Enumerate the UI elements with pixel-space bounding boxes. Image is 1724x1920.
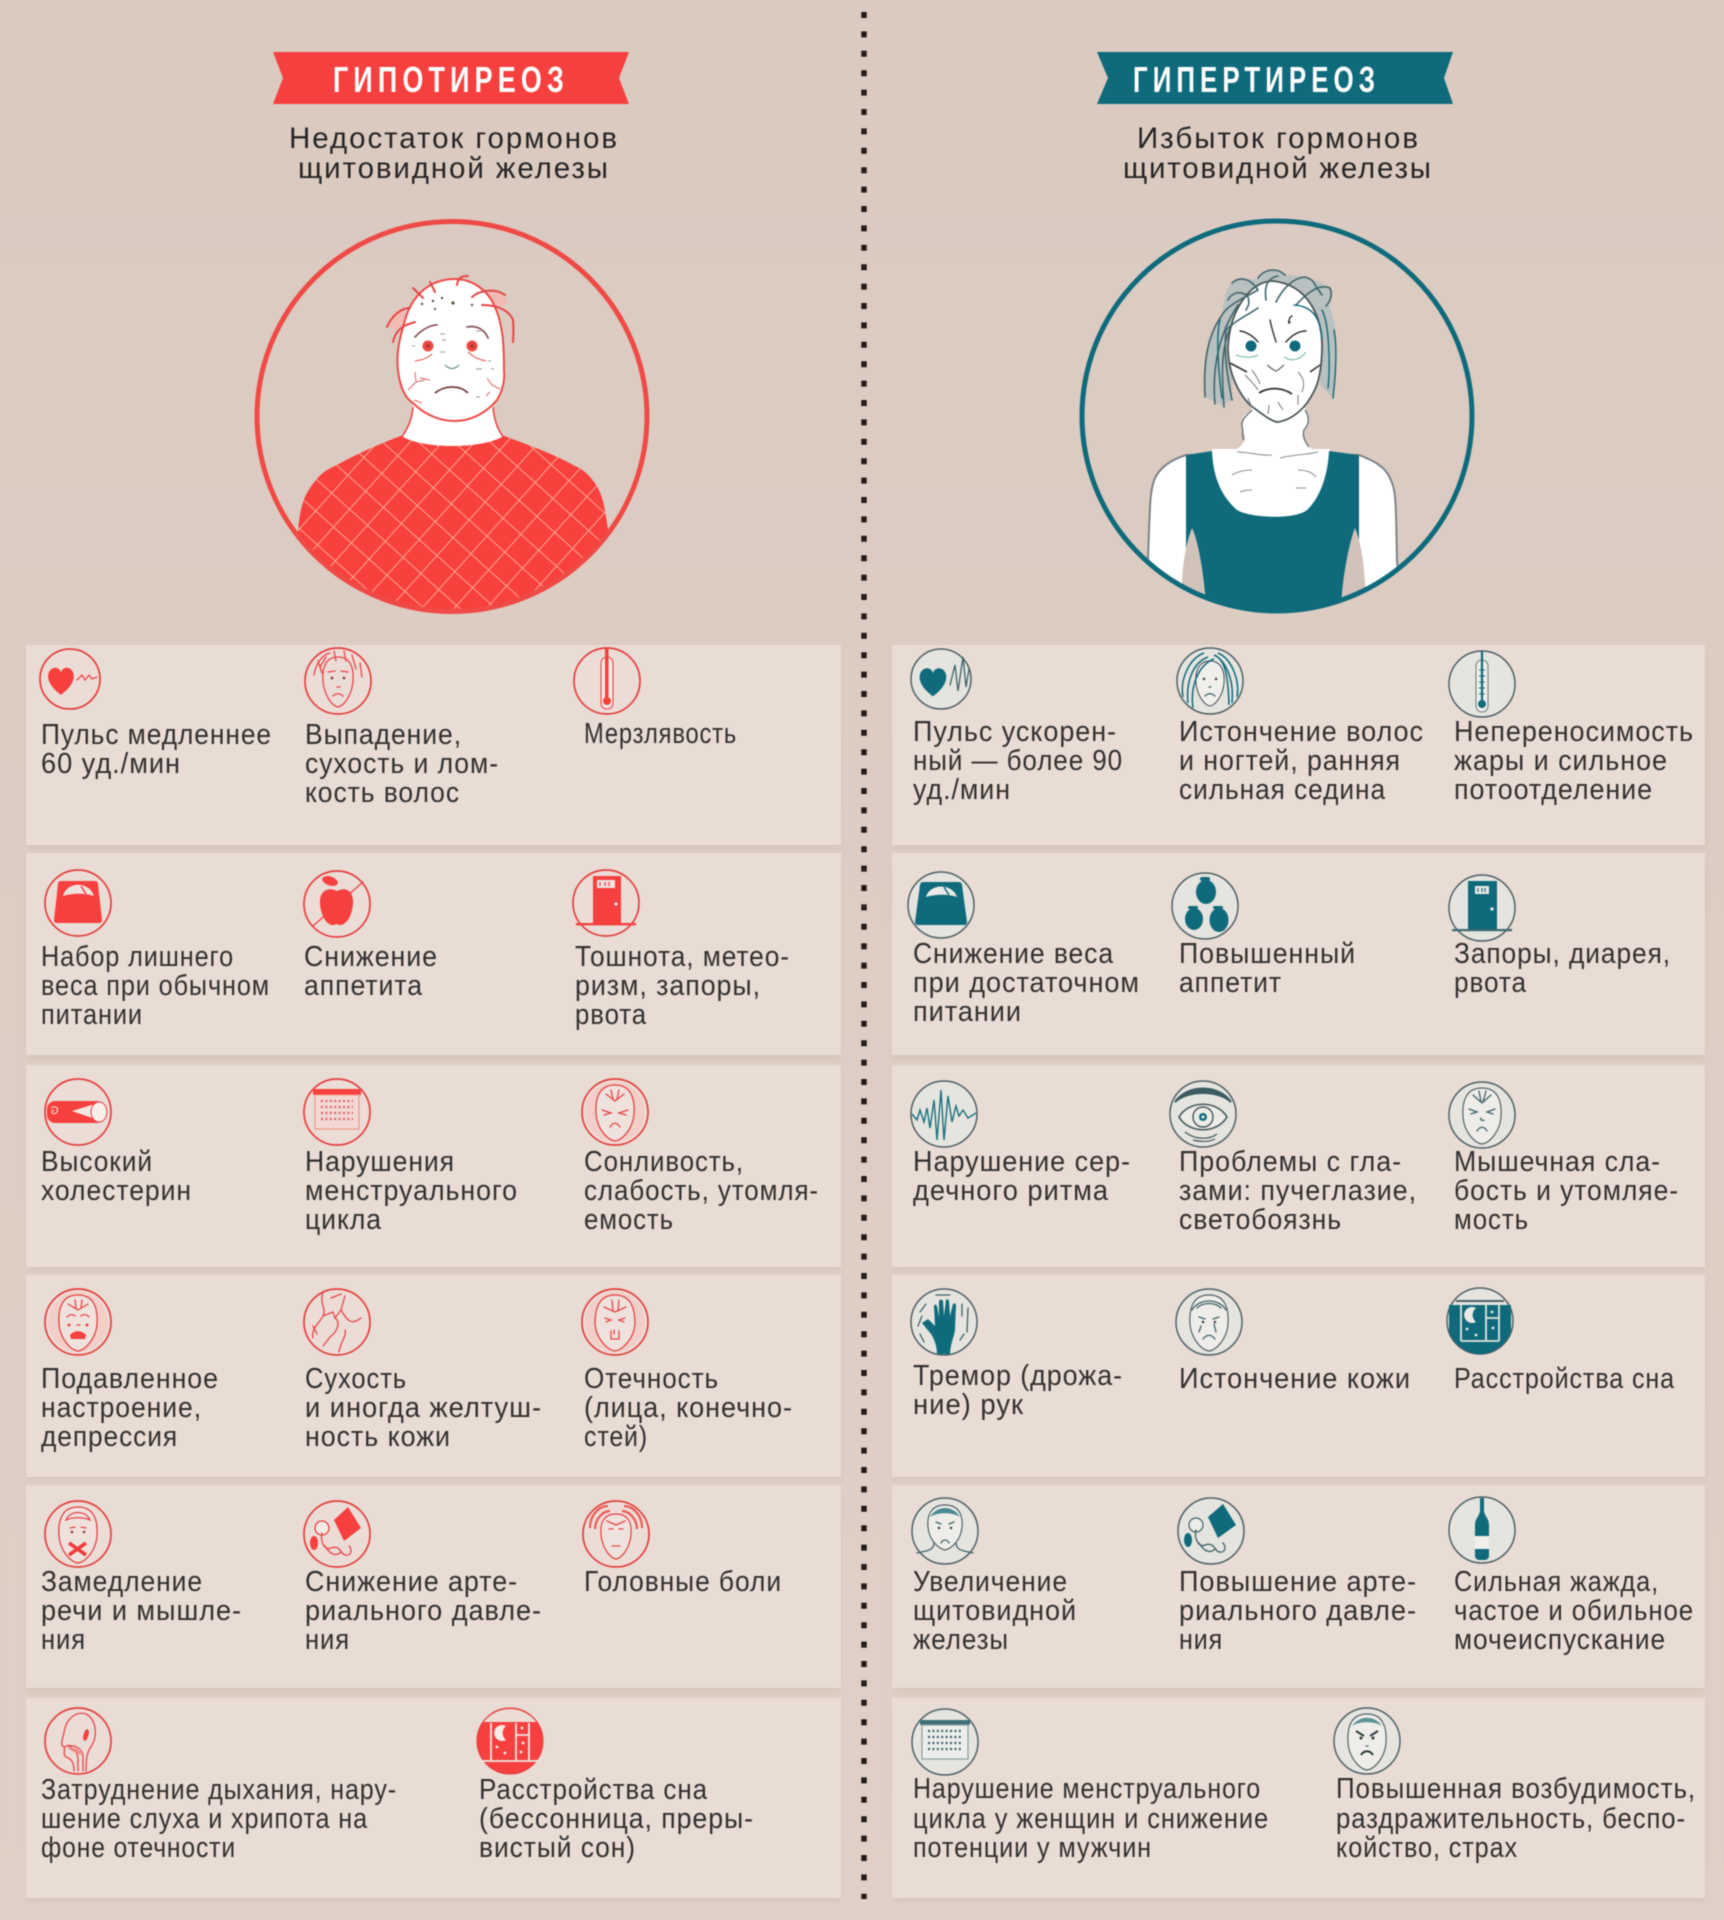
label: Повышенный: [1179, 938, 1356, 970]
label: ния: [1179, 1624, 1223, 1656]
symptom: depression: [41, 1289, 219, 1453]
header: hypothyroidism: [273, 52, 629, 185]
label: ния: [305, 1624, 350, 1656]
label: и ногтей, ранняя: [1179, 745, 1401, 777]
symptom: menstrual and potency disorder: [912, 1709, 1269, 1864]
icon: face with enlarged neck: [912, 1498, 978, 1564]
label: уд./мин: [913, 774, 1011, 806]
label: Непереносимость: [1454, 716, 1694, 748]
symptom: low blood pressure: [304, 1501, 542, 1656]
label: Пульс ускорен-: [913, 716, 1117, 748]
label: мочеиспускание: [1454, 1624, 1666, 1656]
label: [913, 1146, 1131, 1207]
symptom: swelling: [582, 1289, 793, 1453]
label: Тошнота, метео-: [575, 941, 790, 973]
panel: left row 4: [26, 1275, 841, 1477]
symptom: slow pulse: [40, 649, 272, 780]
symptom: eye problems: [1170, 1081, 1417, 1236]
label: (лица, конечно-: [584, 1392, 793, 1424]
label: Увеличение: [913, 1566, 1068, 1598]
label: питании: [41, 999, 143, 1031]
label: рвота: [1454, 967, 1527, 999]
symptom: reduced appetite: [304, 871, 438, 1002]
icon: water bottle: [1449, 1497, 1515, 1563]
symptom: hair loss: [305, 648, 499, 809]
symptom: weight gain: [41, 870, 270, 1031]
label: Нарушение сер-: [913, 1146, 1131, 1178]
label: Мышечная сла-: [1454, 1146, 1661, 1178]
label: Затруднение дыхания, нару-: [41, 1774, 397, 1806]
symptom: heat intolerance: [1449, 651, 1694, 806]
label: [479, 1774, 754, 1864]
label: ния: [41, 1624, 86, 1656]
label: [1179, 1566, 1417, 1656]
symptom: constipation, diarrhea: [1449, 875, 1671, 999]
subtitle: hormone deficiency: щитовидной железы: [298, 152, 608, 185]
label: [41, 719, 272, 780]
symptom: enlarged thyroid: [912, 1498, 1077, 1656]
label: риального давле-: [305, 1595, 542, 1627]
symptom: drowsiness: [582, 1079, 819, 1236]
label: Набор лишнего: [41, 941, 234, 973]
label: питании: [913, 996, 1022, 1028]
icon: bulging eye: [1170, 1081, 1236, 1147]
icon: face with crossed mouth: [45, 1501, 111, 1567]
icon: face with head pain waves: [583, 1501, 649, 1567]
icon: clogged artery: [45, 1079, 111, 1145]
label: [1179, 938, 1356, 999]
label: [1179, 1146, 1417, 1236]
label: [305, 1146, 518, 1236]
label: холестерин: [41, 1175, 192, 1207]
symptom: slow speech and thought: [41, 1501, 242, 1656]
label: стей): [584, 1421, 648, 1453]
label: Снижение арте-: [305, 1566, 518, 1598]
label: риального давле-: [1179, 1595, 1417, 1627]
label: Запоры, диарея,: [1454, 938, 1671, 970]
label: Сухость: [305, 1363, 407, 1395]
symptom: increased appetite: [1172, 873, 1356, 999]
label: аппетита: [304, 970, 423, 1002]
banner: ГИПЕРТИРЕОЗ: [1097, 52, 1453, 104]
label: [1454, 1566, 1694, 1656]
icon: crossed apple: [304, 871, 370, 937]
label: аппетит: [1179, 967, 1282, 999]
symptom: breathing, hearing, hoarseness: [41, 1708, 397, 1864]
icon: toilet door: [1449, 875, 1515, 941]
label: [913, 716, 1123, 806]
label: раздражительность, беспо-: [1336, 1803, 1686, 1835]
label: частое и обильное: [1454, 1595, 1694, 1627]
label: ние) рук: [913, 1389, 1024, 1421]
icon: hot thermometer: [1449, 651, 1515, 717]
icon: toilet door: [573, 870, 639, 936]
label: Нарушения: [305, 1146, 455, 1178]
icon: crying face: [45, 1289, 111, 1355]
label: мость: [1454, 1204, 1529, 1236]
ring: [257, 222, 647, 612]
ring: [1082, 221, 1472, 611]
label: сильная седина: [1179, 774, 1386, 806]
label: [305, 719, 499, 809]
label: [584, 1363, 793, 1453]
symptom: weight loss: [908, 872, 1140, 1028]
label: [913, 1360, 1123, 1421]
label: настроение,: [41, 1392, 202, 1424]
icon: calendar: [912, 1709, 978, 1775]
label: Проблемы с гла-: [1179, 1146, 1402, 1178]
label: [1454, 1146, 1679, 1236]
label: Снижение веса: [913, 938, 1114, 970]
label: [305, 1566, 542, 1656]
label: Сильная жажда,: [1454, 1566, 1659, 1598]
label: [41, 941, 270, 1031]
label: Пульс медленнее: [41, 719, 272, 751]
panel: right row 6: [892, 1698, 1705, 1898]
label: [1336, 1773, 1696, 1864]
label: [584, 1146, 819, 1236]
label: емость: [584, 1204, 674, 1236]
panel: left row 1: [26, 645, 841, 845]
label: ность кожи: [305, 1421, 451, 1453]
label: [575, 941, 790, 1031]
panel: left row 2: [26, 853, 841, 1055]
subtitle: hormone excess: щитовидной железы: [1123, 152, 1431, 185]
label: Расстройства сна: [479, 1774, 708, 1806]
label: сухость и лом-: [305, 748, 499, 780]
label: [41, 1363, 219, 1453]
label: шение слуха и хрипота на: [41, 1803, 368, 1835]
label: Истончение кожи: [1179, 1363, 1411, 1395]
label: Головные боли: [584, 1566, 782, 1598]
label: депрессия: [41, 1421, 178, 1453]
symptom: muscle weakness: [1449, 1082, 1679, 1236]
label: Тремор (дрожа-: [913, 1360, 1123, 1392]
label: Снижение: [304, 941, 438, 973]
label: [913, 938, 1140, 1028]
label: при достаточном: [913, 967, 1140, 999]
label: 60 уд./мин: [41, 748, 181, 780]
label: щитовидной: [913, 1595, 1077, 1627]
banner: ГИПЕРТИРЕОЗ: ГИПЕРТИРЕОЗ: [1133, 59, 1380, 100]
label: зами: пучеглазие,: [1179, 1175, 1417, 1207]
label: [41, 1146, 192, 1207]
icon: face with sparse hair: [305, 648, 371, 714]
panel: right row 4: [892, 1275, 1705, 1477]
label: кость волос: [305, 777, 460, 809]
icon: night window: [1447, 1288, 1513, 1354]
label: фоне отечности: [41, 1832, 236, 1864]
label: рвота: [575, 999, 647, 1031]
label: потоотделение: [1454, 774, 1653, 806]
label: ризм, запоры,: [575, 970, 761, 1002]
symptom: irritability, anxiety: [1334, 1708, 1696, 1864]
label: бость и утомляе-: [1454, 1175, 1679, 1207]
label: Истончение волос: [1179, 716, 1424, 748]
label: слабость, утомля-: [584, 1175, 819, 1207]
subtitle: hormone excess: Избыток гормонов: [1137, 122, 1418, 155]
label: Высокий: [41, 1146, 153, 1178]
symptom: cold sensitivity: [574, 648, 737, 750]
symptom: strong thirst: [1449, 1497, 1694, 1656]
icon: tonometer: [1178, 1498, 1244, 1564]
icon: three apples: [1172, 873, 1238, 939]
icon: irregular heartbeat line: [911, 1081, 977, 1147]
label: [913, 1773, 1269, 1864]
label: [304, 941, 438, 1002]
icon: head section with throat: [45, 1708, 111, 1774]
label: цикла: [305, 1204, 382, 1236]
panel: right row 5: [892, 1485, 1705, 1688]
label: [305, 1363, 542, 1453]
icon: teal scale: [908, 872, 974, 938]
label: ный — более 90: [913, 745, 1123, 777]
label: жары и сильное: [1454, 745, 1668, 777]
icon: calendar: [304, 1079, 370, 1145]
label: дечного ритма: [913, 1175, 1109, 1207]
icon: wrinkled face: [1176, 1289, 1242, 1355]
panel: right row 1: [892, 645, 1705, 845]
label: Расстройства сна: [1454, 1363, 1675, 1395]
label: Повышение арте-: [1179, 1566, 1417, 1598]
label: железы: [913, 1624, 1009, 1656]
icon: tonometer: [304, 1501, 370, 1567]
icon: angry face: [1334, 1708, 1400, 1774]
label: койство, страх: [1336, 1832, 1518, 1864]
symptom: dry skin: [304, 1289, 542, 1453]
symptom: headaches: [583, 1501, 782, 1598]
panel: left row 6: [26, 1698, 841, 1898]
label: Повышенная возбудимость,: [1336, 1773, 1696, 1805]
icon: tired face: [1449, 1082, 1515, 1148]
panel: right row 3: [892, 1065, 1705, 1267]
icon: red scale: [45, 870, 111, 936]
label: Выпадение,: [305, 719, 462, 751]
label: менструального: [305, 1175, 518, 1207]
panel: left row 3: [26, 1065, 841, 1267]
label: и иногда желтуш-: [305, 1392, 542, 1424]
subtitle: hormone deficiency: [289, 122, 617, 185]
symptom: hand tremor: [911, 1289, 1123, 1421]
icon: cold thermometer: [574, 648, 640, 714]
label: Нарушение менструального: [913, 1773, 1261, 1805]
icon: swollen face: [582, 1289, 648, 1355]
label: Подавленное: [41, 1363, 219, 1395]
banner: ГИПОТИРЕОЗ: ГИПОТИРЕОЗ: [333, 59, 569, 100]
symptom: high blood pressure: [1178, 1498, 1417, 1656]
label: [1454, 938, 1671, 999]
label: потенции у мужчин: [913, 1832, 1152, 1864]
symptom: skin thinning: [1176, 1289, 1411, 1395]
icon: cracked skin: [304, 1289, 370, 1355]
label: Мерзлявость: [584, 718, 737, 750]
header: hyperthyroidism: [1097, 52, 1453, 185]
label: (бессонница, преры-: [479, 1803, 754, 1835]
symptom: nausea, constipation: [573, 870, 790, 1031]
icon: heart with slow pulse: [40, 649, 100, 709]
symptom: sleep disorder: [1447, 1288, 1675, 1395]
portrait: woman with hyperthyroidism: [1082, 221, 1472, 640]
label: Сонливость,: [584, 1146, 744, 1178]
icon: face with long thin hair: [1177, 648, 1243, 714]
label: [1454, 716, 1694, 806]
label: Отечность: [584, 1363, 719, 1395]
subtitle: hormone deficiency: Недостаток гормонов: [289, 122, 617, 155]
label: веса при обычном: [41, 970, 270, 1002]
label: [1179, 716, 1424, 806]
subtitle: hormone excess: [1123, 122, 1431, 185]
label: цикла у женщин и снижение: [913, 1803, 1269, 1835]
panel: right row 2: [892, 853, 1705, 1055]
icon: sleepy face: [582, 1079, 648, 1145]
icon: night window: [477, 1708, 543, 1774]
label: [913, 1566, 1077, 1656]
panel: left row 5: [26, 1485, 841, 1688]
label: [41, 1774, 397, 1864]
symptom: fast pulse: [911, 649, 1123, 806]
icon: trembling hand: [911, 1289, 977, 1355]
symptom: sleep disorder: [477, 1708, 754, 1864]
label: речи и мышле-: [41, 1595, 242, 1627]
label: [41, 1566, 242, 1656]
symptom: thinning hair and nails: [1177, 648, 1424, 806]
icon: heart with fast pulse: [911, 649, 971, 709]
banner: ГИПОТИРЕОЗ: [273, 52, 629, 104]
label: светобоязнь: [1179, 1204, 1342, 1236]
symptom: arrhythmia: [911, 1081, 1131, 1207]
symptom: high cholesterol: [41, 1079, 192, 1207]
label: вистый сон): [479, 1832, 636, 1864]
label: Замедление: [41, 1566, 203, 1598]
portrait: man with hypothyroidism: [257, 222, 647, 640]
symptom: menstrual disorder: [304, 1079, 518, 1236]
